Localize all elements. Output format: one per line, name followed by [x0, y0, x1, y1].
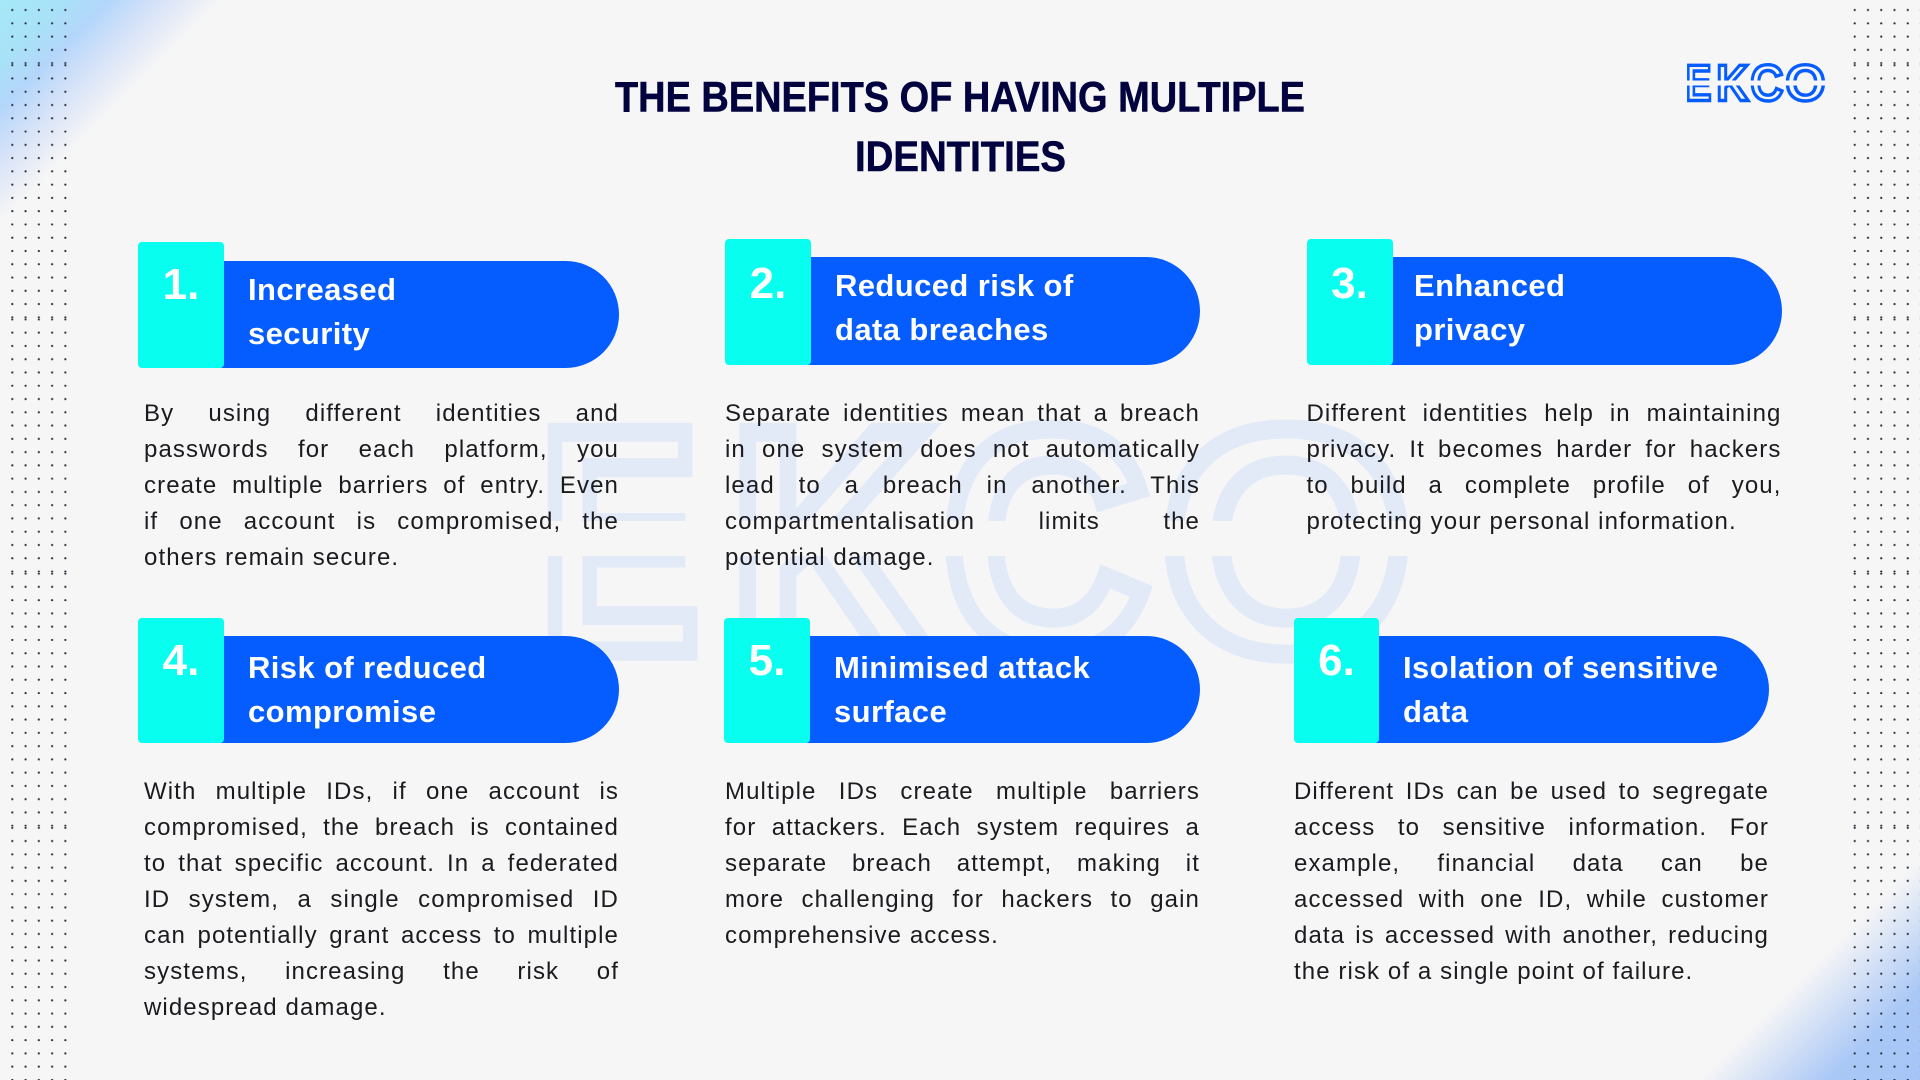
body text: data is accessed with another, reducing — [1294, 922, 1769, 949]
body text: comprehensive access. — [725, 922, 999, 949]
heading bar — [1386, 257, 1782, 365]
number badge — [724, 618, 810, 743]
body text: accessed with one ID, while customer — [1294, 886, 1769, 913]
heading: compromise — [248, 694, 436, 729]
body text — [725, 400, 1200, 571]
panel: 4 risk of reduced compromise — [138, 618, 619, 1021]
heading: Reduced risk of — [835, 268, 1074, 303]
heading bar — [804, 636, 1200, 743]
body text: to that specific account. In a federated — [144, 850, 619, 877]
number badge — [1306, 239, 1392, 365]
background corner gradient top left — [0, 0, 300, 300]
body text: others remain secure. — [144, 544, 399, 571]
body text: access to sensitive information. For — [1294, 814, 1769, 841]
body text: ID system, a single compromised ID — [144, 886, 619, 913]
heading — [248, 650, 487, 729]
body text — [1294, 778, 1769, 985]
body text: create multiple barriers of entry. Even — [144, 472, 619, 499]
number badge — [138, 242, 224, 368]
body text: By using different identities and — [144, 400, 619, 427]
panel: 5 minimised attack surface — [724, 618, 1200, 949]
heading: Enhanced — [1414, 268, 1565, 303]
heading bar — [218, 636, 619, 743]
logo: EKCO — [1686, 58, 1826, 108]
body text: potential damage. — [725, 544, 935, 571]
heading: data breaches — [835, 312, 1049, 347]
heading: Minimised attack — [834, 650, 1090, 685]
heading: surface — [834, 694, 947, 729]
body text: Different IDs can be used to segregate — [1294, 778, 1769, 805]
background corner gradient bottom right — [1680, 840, 1920, 1080]
heading: data — [1403, 694, 1468, 729]
heading — [1414, 268, 1565, 347]
heading bar — [805, 257, 1200, 365]
body text — [144, 778, 619, 1021]
body text: privacy. It becomes harder for hackers — [1306, 436, 1782, 463]
body text: in one system does not automatically — [725, 436, 1200, 463]
body text: compromised, the breach is contained — [144, 814, 619, 841]
body text — [1306, 400, 1782, 535]
heading — [834, 650, 1090, 729]
panel: 6 isolation of sensitive data — [1294, 618, 1769, 985]
heading: security — [248, 316, 370, 351]
number badge: 5. — [749, 636, 785, 685]
heading: privacy — [1414, 312, 1525, 347]
body text — [144, 400, 619, 571]
body text: Separate identities mean that a breach — [725, 400, 1200, 427]
panel: 3 enhanced privacy — [1306, 239, 1782, 535]
title — [615, 74, 1305, 181]
heading — [248, 272, 396, 351]
body text — [725, 778, 1200, 949]
number badge — [138, 618, 224, 743]
body text: widespread damage. — [144, 994, 387, 1021]
body text: for attackers. Each system requires a — [725, 814, 1200, 841]
body text: Multiple IDs create multiple barriers — [725, 778, 1200, 805]
body text: to build a complete profile of you, — [1306, 472, 1782, 499]
heading bar — [1374, 636, 1769, 743]
panel: 2 reduced risk of data breaches — [725, 239, 1200, 571]
body text: if one account is compromised, the — [144, 508, 619, 535]
number badge — [725, 239, 811, 365]
heading: Risk of reduced — [248, 650, 487, 685]
heading — [835, 268, 1074, 347]
body text: systems, increasing the risk of — [144, 958, 619, 985]
body text: lead to a breach in another. This — [725, 472, 1200, 499]
panel: 1 increased security — [138, 242, 619, 571]
heading: Isolation of sensitive — [1403, 650, 1718, 685]
body text: compartmentalisation limits the — [725, 508, 1200, 535]
body text: separate breach attempt, making it — [725, 850, 1200, 877]
title: IDENTITIES — [855, 133, 1066, 181]
heading: Increased — [248, 272, 396, 307]
heading — [1403, 650, 1718, 729]
body text: passwords for each platform, you — [144, 436, 619, 463]
number badge: 4. — [163, 636, 199, 685]
number badge: 2. — [750, 259, 786, 308]
body text: With multiple IDs, if one account is — [144, 778, 619, 805]
heading bar — [218, 261, 619, 368]
body text: more challenging for hackers to gain — [725, 886, 1200, 913]
watermark: EKCO logo — [539, 400, 1412, 690]
number badge: 6. — [1318, 636, 1355, 685]
number badge: 1. — [163, 260, 199, 309]
body text: can potentially grant access to multiple — [144, 922, 619, 949]
number badge: 3. — [1331, 259, 1368, 308]
body text: protecting your personal information. — [1306, 508, 1737, 535]
body text: example, financial data can be — [1294, 850, 1769, 877]
body text: Different identities help in maintaining — [1306, 400, 1782, 427]
number badge — [1294, 618, 1379, 743]
body text: the risk of a single point of failure. — [1294, 958, 1693, 985]
